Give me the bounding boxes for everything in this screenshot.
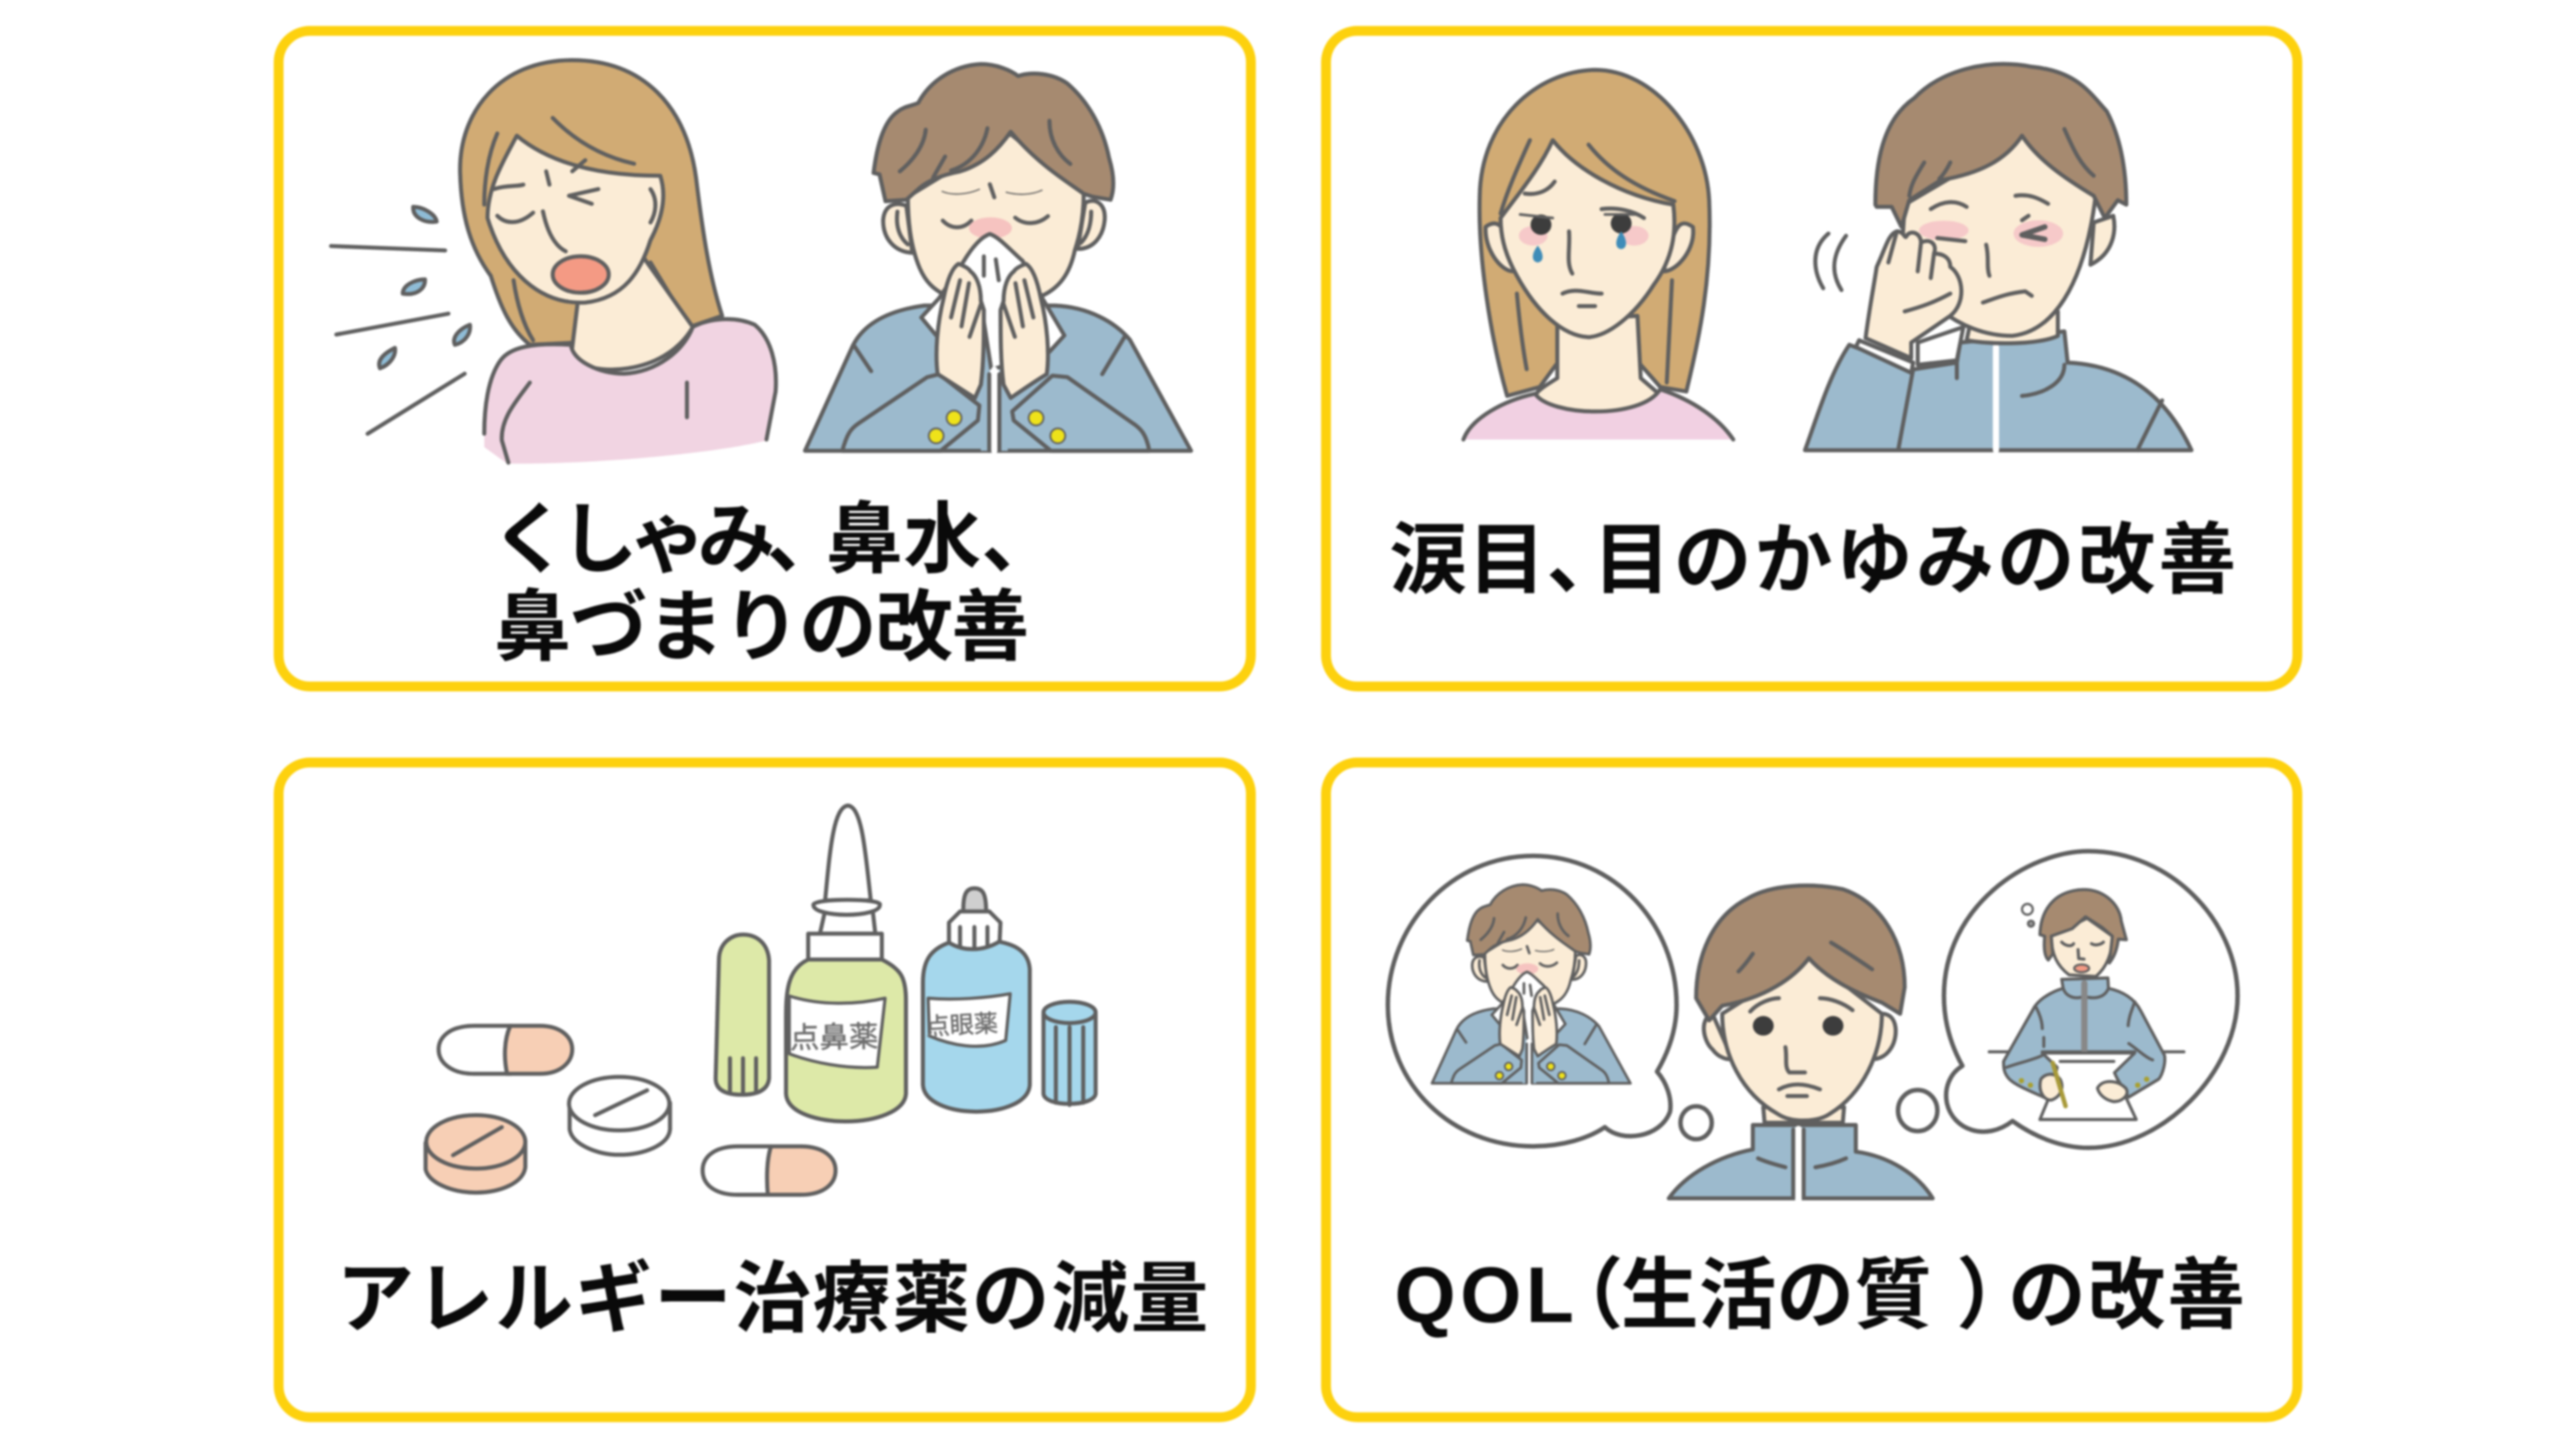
card frame (1326, 30, 2297, 687)
thought bubble: left (1388, 856, 1712, 1147)
caption: （ (1546, 1252, 1623, 1339)
caption: 鼻づまりの改善 (494, 584, 1028, 671)
caption: くしゃみ、 (491, 496, 835, 583)
card frame (279, 30, 1250, 687)
icon: nasal spray cap (716, 935, 769, 1095)
icon: eye drop bottle (923, 888, 1030, 1112)
caption: ） (1956, 1252, 2034, 1339)
icon: nasal spray bottle (786, 806, 906, 1122)
jacket details (2006, 988, 2153, 1067)
illustration: sneezing woman (331, 60, 776, 463)
icon: white tablet (569, 1077, 670, 1155)
table edge (1989, 1050, 2184, 1054)
student hands and pencil (2040, 1063, 2127, 1106)
icon: man rubbing eye (1805, 64, 2191, 450)
paper edge (2060, 1060, 2114, 1063)
dream bubbles (2022, 904, 2034, 927)
caption: 鼻水、 (826, 496, 1059, 583)
icon: sneeze spray (331, 207, 470, 434)
panel: reduced allergy medication (279, 762, 1250, 1417)
icon: man with tissue mini (1432, 885, 1631, 1083)
zipper (2081, 983, 2088, 1051)
caption: アレルギー治療薬の減量 (336, 1256, 1208, 1343)
panel: watery and itchy eyes (1326, 30, 2297, 687)
illustration: tearful woman and man rubbing eye (1463, 64, 2191, 450)
icon: eye drop cap (1044, 1002, 1096, 1105)
illustration: worried man thinking (1388, 856, 1933, 1199)
icon: student jacket (2004, 978, 2165, 1097)
label: nasal drops: 点鼻薬 (790, 1020, 878, 1055)
illustration: medicine bottles and pills (426, 806, 1096, 1195)
icon: worried man (1669, 886, 1933, 1199)
caption: の改善 (2008, 1252, 2247, 1339)
thought bubble: right with student writing (1898, 852, 2238, 1148)
icon: sneezing woman (460, 60, 776, 463)
caption: 生活の質 (1621, 1252, 1932, 1339)
panel: sneezing and runny nose (279, 30, 1250, 687)
panel: quality of life (1326, 762, 2297, 1417)
icon: capsule bottom (703, 1147, 835, 1195)
label: eye drops: 点眼薬 (925, 1010, 999, 1040)
caption: QOL (1394, 1250, 1579, 1339)
icon: man with tissue (805, 64, 1191, 451)
card frame (279, 762, 1250, 1417)
card frame (1326, 762, 2297, 1417)
caption: 目のかゆみの改善 (1593, 517, 2239, 604)
student head (2040, 890, 2126, 977)
bubble outline (1944, 852, 2238, 1148)
caption: 涙目、 (1389, 517, 1625, 604)
small bubble (1898, 1090, 1937, 1131)
icon: tearful woman (1463, 70, 1733, 439)
jacket buttons (2019, 1077, 2149, 1088)
icon: capsule top (438, 1026, 572, 1074)
paper (2040, 1053, 2136, 1120)
icon: peach tablet (426, 1115, 525, 1192)
